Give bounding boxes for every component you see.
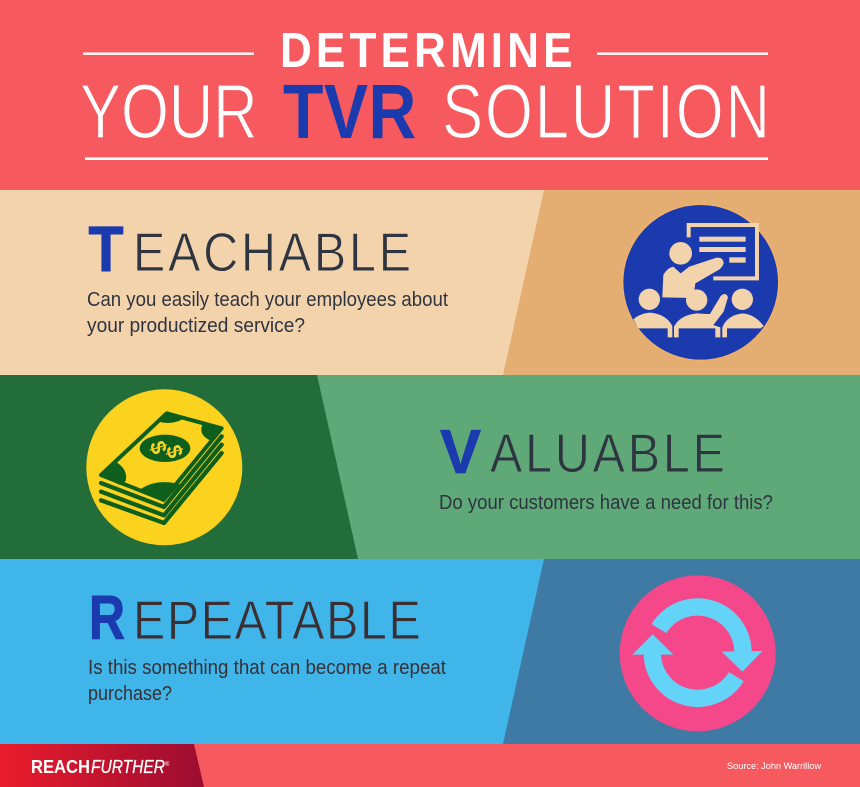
heading: teachable: T xyxy=(88,213,124,285)
text: repeatable question xyxy=(88,657,446,705)
text: repeatable question: purchase? xyxy=(88,683,172,705)
header: title: TVR xyxy=(283,69,416,155)
panel: teachable xyxy=(0,190,860,375)
header: title xyxy=(80,23,770,160)
source note: Source: John Warrillow xyxy=(727,761,821,772)
footer logo: reach further: ® xyxy=(165,761,170,768)
text: repeatable question: Is this something that can become a repeat xyxy=(88,657,446,679)
heading: valuable: ALUABLE xyxy=(490,422,725,484)
icon: repeat arrows xyxy=(620,575,776,731)
panel: valuable xyxy=(0,375,860,559)
header: title: SOLUTION xyxy=(442,68,770,155)
heading: repeatable: R xyxy=(89,584,125,653)
text: teachable question: Can you easily teach your employees about xyxy=(87,289,448,311)
icon: teacher and students xyxy=(623,204,779,360)
icon: money stack: $ xyxy=(161,442,188,461)
footer logo: reach further: FURTHER xyxy=(91,756,165,777)
header: title: YOUR xyxy=(80,68,258,155)
footer logo: reach further xyxy=(0,744,204,787)
heading: valuable: V xyxy=(440,418,481,487)
header: title: DETERMINE xyxy=(280,23,573,78)
panel: repeatable xyxy=(0,559,860,744)
icon: money stack: $ xyxy=(145,438,172,457)
icon: money stack xyxy=(86,389,242,545)
text: teachable question: your productized service? xyxy=(87,315,305,337)
heading: repeatable: EPEATABLE xyxy=(133,589,421,651)
text: valuable question: Do your customers have a need for this? xyxy=(439,492,773,514)
footer logo: reach further: REACH xyxy=(31,756,90,777)
text: teachable question xyxy=(87,289,448,337)
heading: teachable: EACHABLE xyxy=(133,221,411,283)
